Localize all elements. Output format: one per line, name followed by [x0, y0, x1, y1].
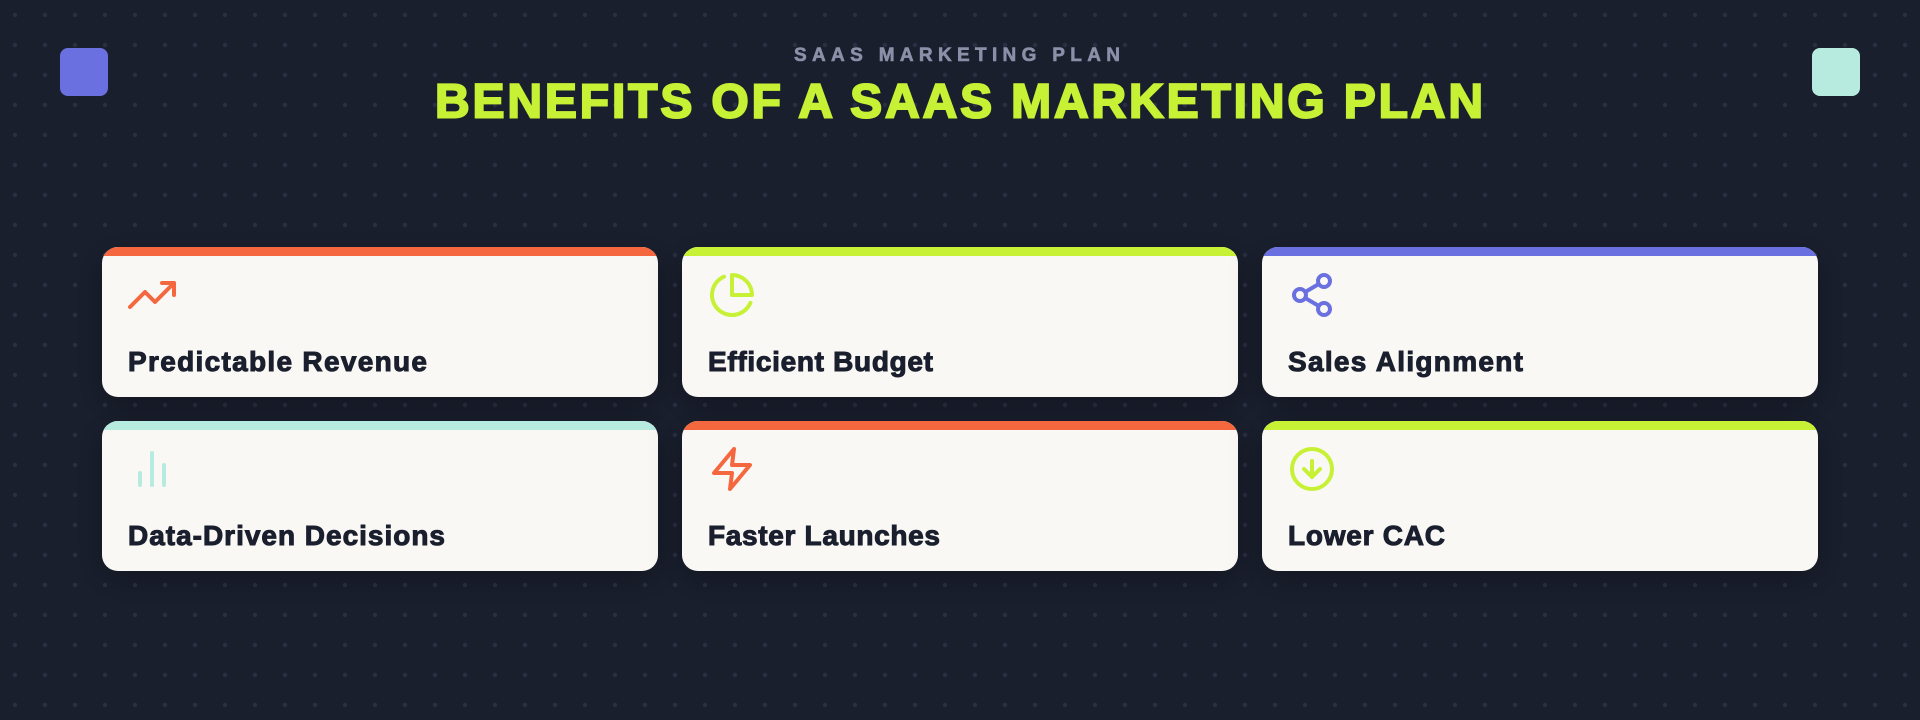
label: Sales Alignment: Sales Alignment	[1288, 346, 1523, 377]
label: Data-Driven Decisions: Data-Driven Decisions	[128, 520, 445, 551]
icon: share nodes	[1294, 275, 1330, 315]
label: Predictable Revenue: Predictable Revenue	[128, 346, 427, 377]
panel: Predictable Revenue	[102, 247, 658, 397]
label: Lower CAC: Lower CAC	[1288, 520, 1445, 551]
label: Faster Launches: Faster Launches	[708, 520, 940, 551]
label: Efficient Budget: Efficient Budget	[708, 346, 933, 377]
icon: bar chart	[140, 453, 164, 485]
decorative square: mint	[1812, 48, 1860, 96]
panel: Sales Alignment	[1262, 247, 1818, 397]
panel: Lower CAC	[1262, 421, 1818, 571]
decorative square: indigo	[60, 48, 108, 96]
icon: lightning bolt	[714, 449, 750, 489]
icon: arrow down circle	[1292, 449, 1332, 489]
panel: Efficient Budget	[682, 247, 1238, 397]
eyebrow heading: SAAS MARKETING PLAN	[794, 45, 1120, 66]
icon: trending up	[130, 283, 174, 307]
title: BENEFITS OF A SAAS MARKETING PLAN	[435, 76, 1483, 128]
panel: Data-Driven Decisions	[102, 421, 658, 571]
icon: pie chart	[712, 275, 752, 315]
panel: Faster Launches	[682, 421, 1238, 571]
